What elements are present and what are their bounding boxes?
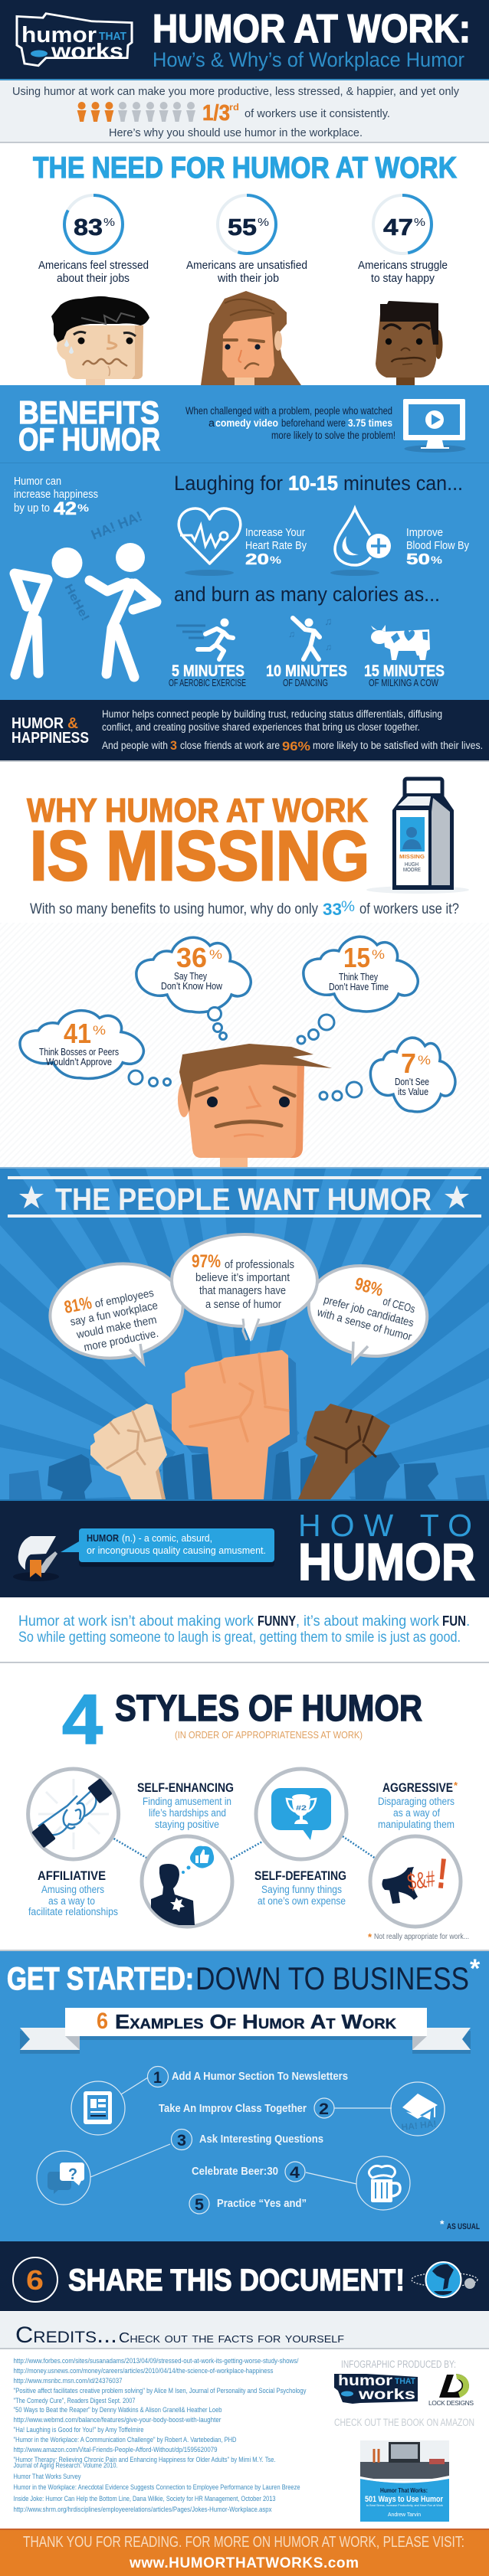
text: humor can increase happiness: 42 [54,499,77,519]
footnote: as usual: AS USUAL [447,2222,480,2231]
icon: dancer: ♫ [325,642,332,652]
illustration: worried man [178,1044,332,1167]
style: aggressive: * [454,1780,458,1791]
stat: heart rate 20 percent: 20 [245,551,269,568]
logo: lock designs: LOCK DESIGNS [428,2399,474,2407]
heading: laughing for 10-15 minutes: 10-15 [288,472,338,495]
text: humor helps connect people: close friends at work are [180,740,280,751]
speech bubble: 81 percent [44,1255,189,1367]
heading: humor and happiness: & [67,715,78,732]
panel: credits [0,2311,489,2349]
logo: humor that works [17,14,132,66]
book cover: Andrew Tarvin [388,2512,421,2518]
text: humor helps connect people: conflict, and creating positive shared experiences that bring us closer together. [102,721,420,733]
list: source references: Journal of Aging Research. Volume 2010. [14,2461,118,2470]
text: humor helps connect people: 3 [170,738,177,753]
list: source references: http://www.msnbc.msn.com/id/24376037 [14,2377,123,2385]
footnote: as usual [440,2218,480,2231]
heading: share this document: SHARE THIS DOCUMENT! [68,2264,405,2297]
style: aggressive: AGGRESSIVE [382,1780,453,1795]
list: source references: Humor in the Workplace: Anecdotal Evidence Suggests Connection to Employee Performance by Lauren Breeze [14,2483,300,2492]
style: self-enhancing: SELF-ENHANCING [137,1780,234,1795]
speech bubble: 98 percent [300,1255,435,1367]
stat: heart rate 20 percent [245,527,307,568]
thought cloud: 41 percent: Think Bosses or Peers [39,1046,119,1058]
text: humor helps connect people: 96% [282,739,310,754]
heading: why humor at work is missing: IS MISSING [30,817,369,895]
stat: 10 minutes of dancing [266,662,347,688]
heading: get started down to business: * [470,1954,481,1983]
item 1: add a humor section: Add A Humor Section To Newsletters [172,2070,348,2083]
speech bubble: 97 percent: a sense of humor [205,1299,281,1311]
icon: milk carton: HUGH [405,862,418,868]
icon: graduation cap [391,2082,445,2136]
list: source references [14,2357,307,2514]
thought cloud: 7 percent: % [418,1053,431,1067]
stat: 15 minutes of milking a cow: 15 MINUTES [364,662,445,680]
book cover: to Beat Stress, Increase Productivity, and Have Fun at Work [366,2503,443,2507]
item 3: interesting questions: Ask Interesting Questions [199,2133,323,2146]
stat: 83 percent stressed [38,195,149,285]
thought cloud: 41 percent: % [93,1023,106,1038]
heading: how to humor [298,1508,475,1591]
item 1: add a humor section: 1 [153,2069,162,2087]
heading: 4 styles of humor [62,1681,422,1759]
list: source references: http://www.amazon.com/Vital-Friends-People-Afford-Without/dp/1595620079 [14,2446,218,2454]
stat: 47 percent struggle [358,195,448,285]
panel: humor and happiness [0,700,489,762]
icon: dancer: ♫ [324,615,333,627]
text: humor helps connect people [102,708,483,754]
heading: laughing for 10-15 minutes: minutes can... [343,472,463,495]
style: aggressive: Disparaging others [378,1796,455,1807]
connector lines [90,2077,392,2184]
stat: blood flow 50 percent: Improve [406,527,443,539]
text: humor can increase happiness: increase happiness [14,489,98,501]
text: funny versus fun: , it’s about making work [296,1613,439,1630]
footnote: as usual: * [440,2218,445,2230]
logo: humor that works small [334,2373,418,2404]
icon: question bubbles [37,2151,90,2205]
stat: 15 minutes of milking a cow [364,662,445,688]
stat: 47 percent struggle: 47 [383,214,413,240]
item 4: celebrate beer:30 [192,2162,305,2182]
heading: humor and happiness: HUMOR [11,715,64,732]
footnote: not really appropriate [368,1931,469,1943]
speech bubble: 98 percent: with a sense of humor [315,1306,413,1344]
style: affiliative: AFFILIATIVE [38,1868,106,1883]
heading: how to humor: HOW TO [298,1508,472,1543]
icon: speech bubble with trophy: #2 [296,1804,307,1812]
thought cloud: 15 percent [297,937,418,1044]
icon: runner [176,619,233,659]
panel: footer thank you [0,2529,489,2576]
thought cloud: 41 percent: 41 [64,1018,91,1049]
item 2: improv class: 2 [319,2100,329,2118]
heading: humor and happiness: HAPPINESS [11,730,89,747]
stat: 5 minutes of aerobic exercise: 5 MINUTES [172,662,244,680]
heading: why humor at work is missing [27,792,369,895]
thought cloud: 7 percent [320,1038,455,1112]
text: funny versus fun: FUNNY [258,1613,296,1629]
icon: newsletter [71,2081,125,2135]
icon: unhappy woman face [201,291,301,385]
text: humor can increase happiness [14,476,98,519]
heading: laughing for 10-15 minutes: Laughing for [174,472,283,495]
item 3: interesting questions [172,2129,323,2150]
intro line 2: of workers use it consistently. [244,107,390,120]
thought cloud: 36 percent: % [209,947,222,962]
text: humor helps connect people: Humor helps connect people by building trust, reducing status differentials, diffusing [102,708,442,720]
definition speech bubble: (n.) - a comic, absurd, [122,1532,212,1544]
icon: dictionary book [13,1536,59,1581]
speech bubble: 97 percent: that managers have [199,1285,286,1297]
item 5: practice yes and: 5 [195,2196,204,2214]
panel: get started [0,1951,489,2241]
style: self-enhancing: Finding amusement in [143,1796,231,1807]
people icons: 3 of 9 orange [77,102,195,122]
stat: heart rate 20 percent: Heart Rate By [245,540,307,552]
text: website url: www.HUMORTHATWORKS.com [129,2555,359,2571]
thought cloud: 15 percent: % [372,947,385,962]
comedy video callout text: 3.75 times [348,417,392,429]
item 5: practice yes and: Practice “Yes and” [217,2197,307,2210]
stat: 15 minutes of milking a cow: OF MILKING A COW [369,677,439,688]
thought cloud: 15 percent: Think They [339,971,378,982]
heading: benefits of humor: OF HUMOR [18,421,160,457]
stat: 83 percent stressed: Americans feel stressed [38,259,149,272]
comedy video callout text [185,405,395,441]
panel: credits: Check out the facts for yourself [119,2330,344,2346]
list: source references: "Humor Therapy: Relieving Chronic Pain and Enhancing Happiness for Older Adults" by Mimi M.Y. Tse. [14,2456,276,2464]
icon: beer mug [356,2156,410,2210]
subtitle: How’s & Why’s of Workplace Humor [153,48,464,71]
star right [445,1185,469,1208]
book cover [360,2440,449,2522]
list: source references: Inside Joke: Humor Can Help the Bottom Line, Dana Wilkie, Society for HR Management, October 2013 [14,2495,276,2503]
thought cloud: 15 percent: Don’t Have Time [329,981,389,992]
logo: humor that works: THAT [99,30,126,43]
illustration: center fist [172,1350,297,1499]
style: aggressive: manipulating them [378,1819,455,1830]
heading: why humor at work is missing: WHY HUMOR AT WORK [27,792,368,829]
speech bubble: 97 percent [172,1234,317,1342]
stat: 5 minutes of aerobic exercise: OF AEROBIC EXERCISE [169,677,246,688]
speech bubble: 81 percent: of employees [94,1287,155,1310]
item 1: add a humor section [147,2066,348,2087]
stat: 10 minutes of dancing: OF DANCING [283,677,328,688]
logo: humor that works small: humor [338,2373,393,2389]
style: self-enhancing: life’s hardships and [149,1807,226,1819]
panel: how to humor [0,1501,489,1597]
thought cloud: 41 percent: Wouldn’t Approve [46,1056,112,1067]
comedy video callout text: When challenged with a problem, people who watched [185,405,392,417]
style: affiliative: facilitate relationships [28,1906,118,1917]
icon: milk carton: MOORE [403,868,421,873]
style: self-defeating: at one’s own expense [258,1895,346,1907]
ribbon banner: 6 examples: 6 [97,2009,108,2034]
thought cloud: 36 percent [136,937,251,1040]
ribbon banner: 6 examples [20,2008,471,2054]
logo: humor that works: humor [21,23,97,47]
style: self-defeating: SELF-DEFEATING [254,1868,346,1883]
header band [0,0,489,80]
style: self-defeating: Saying funny things [261,1884,342,1895]
stat: 83 percent stressed: % [103,216,115,229]
text: humor helps connect people: And people with [102,740,168,751]
comedy video callout text: a [208,417,215,429]
item 2: improv class [159,2098,334,2118]
list: source references: "50 Ways to Beat the Reaper" by Denny Watkins & Alison Granell& Heather Loeb [14,2406,222,2414]
item 3: interesting questions: 3 [177,2132,186,2149]
icon: circled six: 6 [26,2264,44,2296]
list: source references: "Positive affect facilitates creative problem solving" by Alice M Isen, Journal of Personality and Social Psychology [14,2387,307,2395]
heading: get started down to business: GET STARTED: [7,1960,194,1996]
dotted connectors [113,1836,376,1859]
definition speech bubble [61,1528,274,1567]
icon: dancer [288,615,333,659]
illustration: two laughing stick figures: HA! HA! [89,508,144,543]
thought cloud: 41 percent [20,1011,170,1086]
comedy video callout text: more likely to solve the problem! [271,430,395,441]
heading: burn calories: and burn as many calories as... [174,583,440,606]
speech bubble: 98 percent: 98% [353,1273,386,1300]
list: source references: http://www.webmd.com/balance/features/give-your-body-boost-with-laughter [14,2416,221,2424]
stat: blood flow 50 percent: 50 [406,551,430,568]
text: funny versus fun: FUN [442,1613,466,1629]
icon: milk carton [366,779,469,894]
panel: credits: Credits... [15,2323,117,2348]
icon: dancer: ♫ [288,629,295,639]
stat: blood flow 50 percent [406,527,470,568]
icon: graduation cap: HA! HA! [401,2118,437,2133]
thought cloud: 36 percent: 36 [176,942,207,973]
heading: benefits of humor: BENEFITS [18,394,159,430]
text: humor can increase happiness: by up to [14,502,50,515]
icon: blood drop with plus [330,508,392,576]
question text [30,899,459,919]
logo: humor that works: works [51,39,123,63]
comedy video callout text: comedy video [215,417,278,429]
ribbon banner: 6 examples: Examples Of Humor At Work [115,2010,396,2033]
icon: circled six [13,2257,57,2302]
speech bubble: 81 percent: 81% [63,1293,94,1317]
stat: heart rate 20 percent: Increase Your [245,527,305,539]
stat: 55 percent unsatisfied: with their job [217,272,279,285]
panel: share this document [0,2241,489,2311]
icon: speech bubble with trophy [271,1788,331,1840]
style: self-enhancing: staying positive [155,1819,219,1830]
text: funny versus fun: Humor at work isn’t about making work [18,1613,254,1630]
definition speech bubble: or incongruous quality causing amusment. [87,1545,266,1556]
item 4: celebrate beer:30: 4 [290,2164,300,2182]
icon: milk carton: MISSING [399,853,425,860]
stat: one third: 1/3 [202,101,230,126]
logo: lock designs [428,2374,474,2407]
speech bubble: 81 percent: say a fun workplace [69,1299,159,1329]
list: source references: http://www.forbes.com/sites/susanadams/2013/04/09/stressed-out-at-work-its-getting-worse-study-shows/ [14,2357,299,2365]
footnote: not really appropriate: * [368,1931,372,1943]
logo: humor that works small: works [358,2387,415,2403]
speech bubble: 97 percent: of professionals [225,1259,294,1271]
style: self-enhancing [137,1780,234,1927]
intro line 1: Using humor at work can make you more productive, less stressed, & happier, and yet only [12,85,459,98]
illustration: background crowd of fists [9,1451,487,1501]
question text: With so many benefits to using humor, why do only [30,901,318,917]
question text: 33 [323,900,342,919]
style: self-defeating [254,1769,346,1907]
list: source references: Humor That Works Survey [14,2473,81,2481]
icon: video monitor [403,399,466,453]
item 5: practice yes and [189,2194,307,2214]
thought cloud: 7 percent: its Value [398,1086,428,1097]
style: affiliative: as a way to [48,1895,95,1907]
icon: heart rate [179,508,241,576]
stat: 47 percent struggle: Americans struggle [358,259,448,272]
heading: 4 styles of humor: 4 [62,1681,103,1759]
icon: person thinking thumbs up [151,1846,214,1925]
heading: 4 styles of humor: (IN ORDER OF APPROPRIATENESS AT WORK) [175,1729,363,1741]
list: source references: http://money.usnews.com/money/careers/articles/2010/04/14/the-science-of-workplace-happiness [14,2367,274,2375]
thought cloud: 7 percent: 7 [401,1048,416,1079]
stat: 5 minutes of aerobic exercise [169,662,246,688]
speech bubble: 81 percent: would make them [75,1314,158,1342]
heading: 4 styles of humor: STYLES OF HUMOR [115,1688,422,1729]
list: source references: "Humor in the Workplace: A Communication Challenge" by Robert A. Vartebedian, PHD [14,2436,237,2444]
intro band [0,80,489,143]
text: humor can increase happiness: % [77,502,90,514]
icon: question bubbles: ? [68,2166,77,2183]
stat: 47 percent struggle: to stay happy [371,272,435,285]
icon: megaphone with swear symbols: ! [435,1849,450,1898]
icon: megaphone with swear symbols: $&# [405,1866,437,1895]
icon: stressed man face [51,296,149,386]
speech bubble: 97 percent: believe it’s important [195,1272,290,1284]
illustration: right dark fist [298,1404,390,1499]
illustration: two laughing stick figures [15,508,156,677]
stat: 47 percent struggle: % [414,216,425,229]
speech bubble: 98 percent: of CEOs [382,1296,416,1316]
text: humor can increase happiness: Humor can [14,476,61,488]
style: aggressive [370,1780,461,1927]
heading: the people want humor: THE PEOPLE WANT HUMOR [55,1182,432,1217]
stat: heart rate 20 percent: % [270,554,282,566]
item 2: improv class: Take An Improv Class Together [159,2102,307,2115]
stat: blood flow 50 percent: % [431,554,443,566]
style: aggressive: as a way of [393,1807,440,1819]
thought cloud: 36 percent: Don’t Know How [161,980,222,992]
stat: 83 percent stressed: about their jobs [57,272,130,285]
stat: 55 percent unsatisfied: % [258,216,269,229]
stat: blood flow 50 percent: Blood Flow By [406,540,470,552]
panel: benefits of humor [0,385,489,700]
item 4: celebrate beer:30: Celebrate Beer:30 [192,2165,278,2178]
speech bubble: 97 percent: 97% [192,1251,221,1272]
heading: humor and happiness [11,715,89,747]
text: funny versus fun: . [466,1613,470,1630]
intro line 3: Here’s why you should use humor in the workplace. [109,126,363,139]
icon: megaphone with swear symbols [382,1849,450,1904]
stat: 55 percent unsatisfied [186,195,307,285]
definition speech bubble: HUMOR [87,1532,120,1544]
style: affiliative [28,1769,119,1917]
illustration: left light fist [90,1404,167,1499]
icon: cow [371,625,430,660]
text: funny versus fun [18,1613,470,1646]
list: source references: "The Comedy Cure", Readers Digest Sept. 2007 [14,2397,135,2405]
heading: laughing for 10-15 minutes [174,472,463,495]
thought cloud: 36 percent: Say They [174,970,207,982]
heading: get started down to business [7,1954,481,1996]
heading: benefits of humor [18,394,160,457]
stat: 55 percent unsatisfied: Americans are unsatisfied [186,259,307,272]
speech bubble: 98 percent: prefer job candidates [322,1294,415,1330]
style: affiliative: Amusing others [41,1884,104,1895]
book cover: 501 Ways to Use Humor [365,2495,444,2504]
stat: 10 minutes of dancing: 10 MINUTES [266,662,347,680]
stat: 83 percent stressed: 83 [74,214,103,240]
comedy video callout text: beforehand were [281,417,346,429]
question text: of workers use it? [359,901,459,917]
logo: humor that works small: THAT [395,2377,415,2386]
panel: the people want humor [0,1167,489,1501]
speech bubble: 81 percent: more productive. [83,1328,159,1354]
thought cloud: 15 percent: 15 [343,942,370,973]
icon: globe with orbit [412,2262,478,2297]
footnote: not really appropriate: Not really appropriate for work... [374,1933,469,1941]
icon: unhappy man face [376,301,443,386]
stat: 55 percent unsatisfied: 55 [228,214,257,240]
icon: fist bump [31,1778,113,1848]
star left [19,1185,44,1208]
illustration: two laughing stick figures: HeHe! [61,582,92,623]
question text: % [341,899,355,915]
stat: one third: rd [229,102,239,113]
list: source references: "Ha! Laughing is Good for You!" by Amy Toffelmire [14,2426,144,2434]
list: source references: http://www.shrm.org/hrdisciplines/employeerelations/articles/Pages/Jokes-Humor-Workplace.aspx [14,2506,272,2514]
book cover: Humor That Works: [380,2487,428,2494]
thought cloud: 7 percent: Don’t See [395,1076,429,1087]
